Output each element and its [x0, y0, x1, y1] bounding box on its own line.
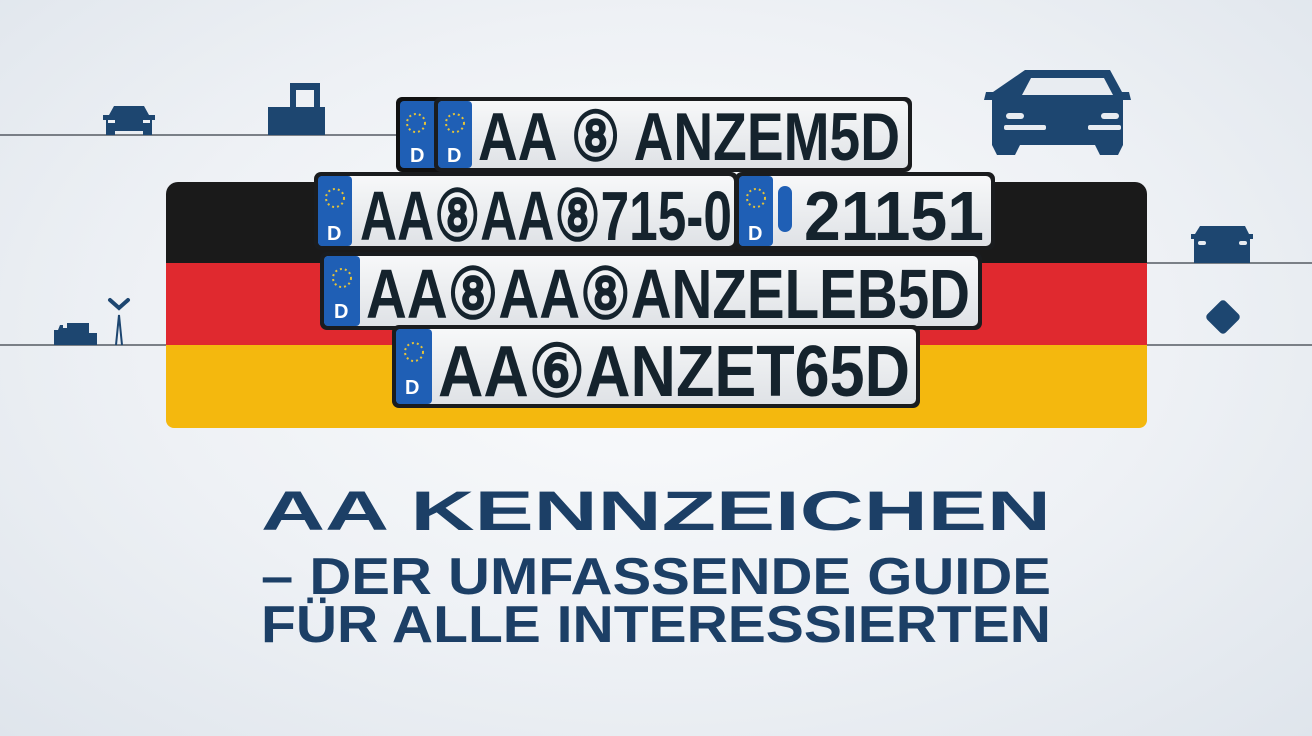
icon: diamond [1205, 299, 1241, 335]
plate 2 [314, 172, 738, 255]
plate 5: D [405, 377, 419, 399]
title [261, 479, 1051, 654]
plate: back: D [410, 145, 424, 167]
plate 4: AA⑧AA⑧ANZELEB5D [366, 255, 970, 333]
title: AA KENNZEICHEN [261, 479, 1051, 542]
icon: small car right [1191, 226, 1253, 263]
flag [166, 182, 1147, 428]
title: – DER UMFASSENDE GUIDE [261, 548, 1051, 606]
plate 1: D [447, 145, 461, 167]
title: FÜR ALLE INTERESSIERTEN [261, 596, 1051, 654]
plates [314, 97, 995, 412]
plate 2: AA⑧AA⑧715-0 [360, 177, 732, 255]
lines [0, 135, 1312, 345]
plate 3: D [748, 223, 762, 245]
icon: small car left [103, 106, 155, 135]
icon: big car right [984, 70, 1131, 155]
plate 4: D [334, 301, 348, 323]
icon: factory [54, 323, 97, 345]
icon: building [268, 83, 325, 135]
plate: back [396, 97, 456, 172]
plate 2: D [327, 223, 341, 245]
plate 3 [735, 172, 995, 255]
plate 1: AA ⑧ ANZEM5D [478, 99, 900, 175]
icon: wind turbine [110, 300, 128, 345]
plate 5: AA⑥ANZET65D [438, 332, 910, 412]
plate 3: 21151 [804, 177, 984, 255]
